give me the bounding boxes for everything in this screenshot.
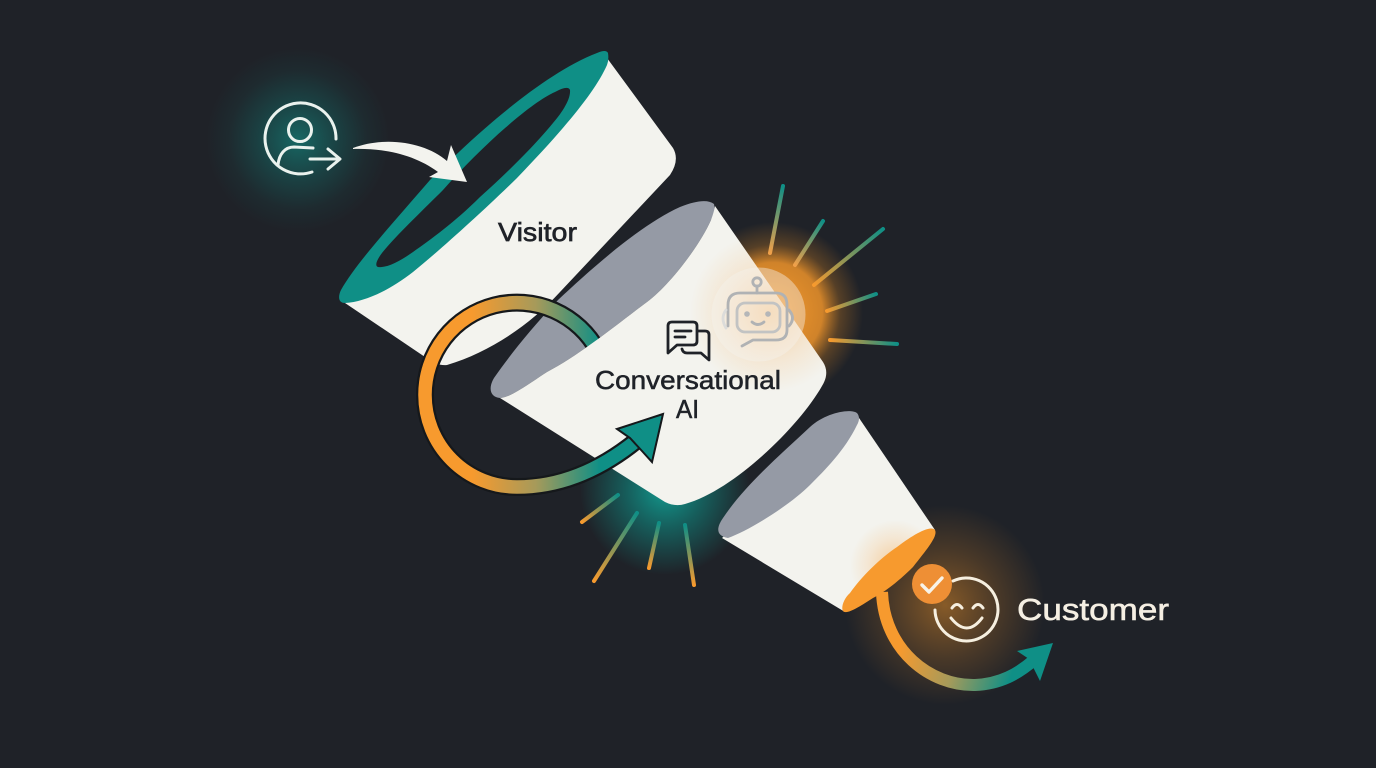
arrow: visitor into funnel [353, 142, 467, 182]
infographic canvas [228, 51, 1169, 696]
glow: customer [845, 505, 1045, 705]
icon: check badge [912, 564, 952, 604]
icon: robot [723, 278, 792, 346]
glow: conversational bottom [580, 405, 750, 575]
icon: smiling customer [935, 578, 998, 641]
icon: chat bubbles [668, 322, 709, 360]
funnel 3 orange rim [842, 528, 936, 612]
loop arrow head [617, 414, 663, 462]
label: Conversational AI: AI [676, 394, 699, 424]
glow: visitor [206, 48, 390, 232]
funnel 3 opening [718, 411, 859, 538]
rays: robot burst [770, 186, 897, 344]
funnel stage: Visitor [339, 51, 676, 365]
badge circle [712, 268, 806, 362]
label: Conversational AI: Conversational [595, 365, 781, 395]
label: Visitor: Visitor [498, 217, 577, 247]
icon: visitor entering [265, 103, 340, 174]
loop arrow: front portion [425, 395, 663, 487]
funnel 3 body [722, 415, 935, 612]
body tint from robot glow [700, 248, 821, 382]
funnel 2 opening [491, 201, 715, 398]
label: Conversational AI [595, 365, 781, 424]
body tint from customer glow [856, 526, 918, 580]
label: Customer: Customer [1017, 592, 1169, 627]
robot badge [712, 268, 806, 362]
funnel stage: Conversational AI [500, 206, 850, 505]
glow: robot [683, 222, 863, 402]
funnel stage: Customer [718, 411, 940, 612]
loop arrow: back portion [425, 303, 598, 395]
arrow: customer exit [882, 592, 1053, 685]
funnel 1 teal rim [339, 51, 608, 303]
funnel 1 opening [376, 88, 570, 267]
exit arrow head [1017, 643, 1053, 681]
funnel 1 body [345, 58, 676, 365]
funnel 2 body [500, 206, 826, 505]
rays: conversation burst [582, 495, 694, 585]
